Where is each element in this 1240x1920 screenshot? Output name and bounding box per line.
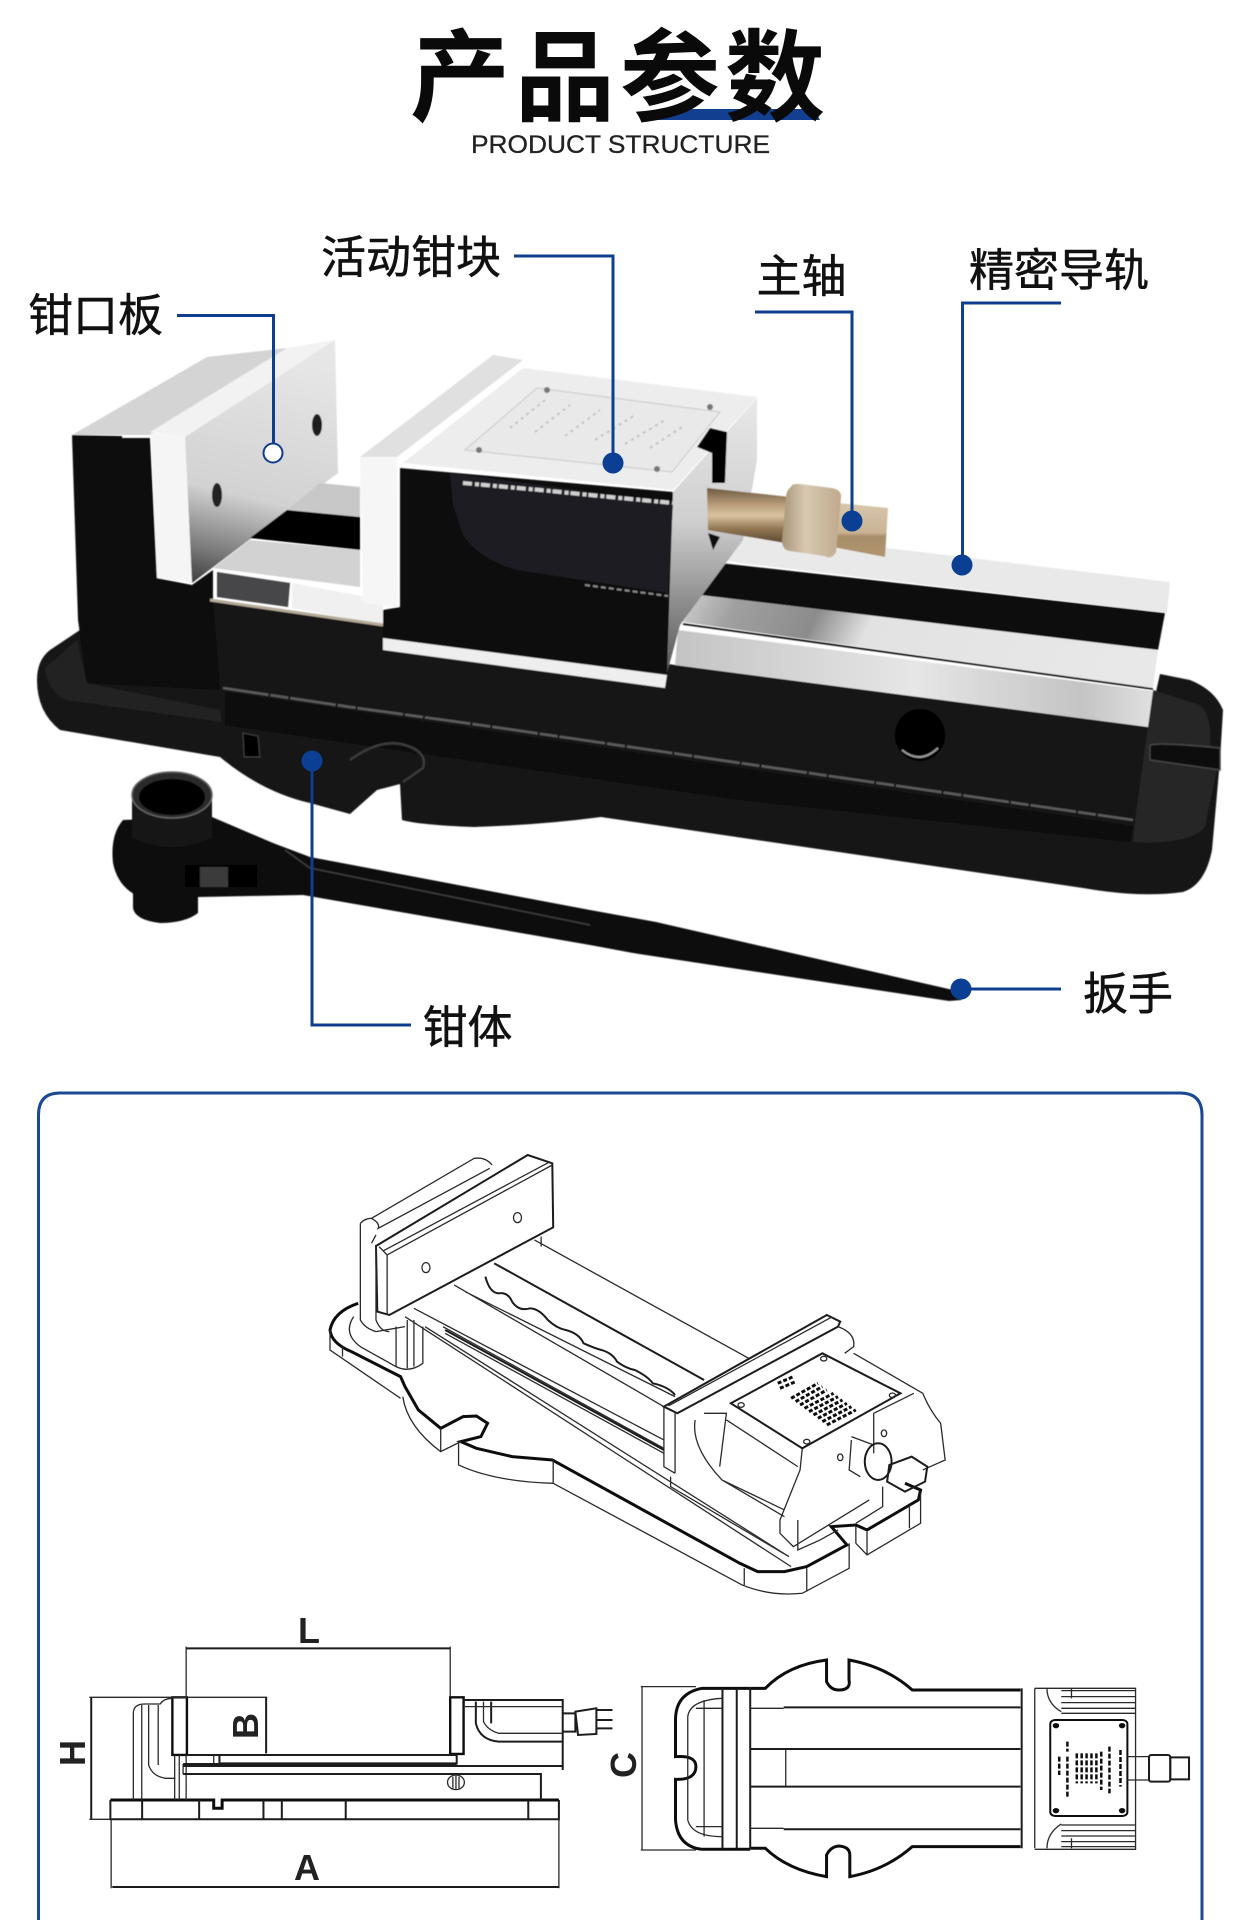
leader [962, 303, 1061, 562]
drawing: isometric vise [330, 1155, 945, 1594]
marker [952, 554, 972, 576]
moving jaw front [383, 468, 673, 673]
panel: dimension drawings [38, 1093, 1202, 1920]
dimension label: C: C [603, 1752, 644, 1778]
moving jaw recess [450, 473, 673, 593]
tray inner right [1133, 690, 1220, 842]
tray slot right [1150, 744, 1220, 770]
isometric name plate [731, 1353, 900, 1448]
tray inner left [45, 640, 222, 722]
side dimension lines [89, 1647, 559, 1888]
right black band [700, 563, 1165, 650]
wrench highlight [285, 850, 590, 925]
rear jaw plate top [150, 340, 335, 437]
top name plate [1050, 1720, 1127, 1816]
isometric rails [405, 1237, 791, 1567]
jaw slot [697, 428, 727, 483]
spindle shaft [707, 488, 790, 543]
locating lobe [350, 743, 424, 782]
label: 精密导轨 [969, 245, 1149, 296]
wrench [112, 772, 962, 1001]
top dividers and rails [688, 1688, 1035, 1848]
marker [950, 978, 972, 1000]
vise tray and body silhouette [37, 600, 1223, 894]
moving jaw base strip [383, 638, 667, 688]
wrench socket [132, 795, 212, 847]
beige strip [210, 600, 383, 625]
callout: 扳手 [950, 968, 1173, 1020]
leader [177, 316, 274, 445]
callout: 钳体 [302, 750, 513, 1053]
title text: 产品参数 [410, 23, 830, 135]
top moving jaw [1035, 1688, 1136, 1849]
jaw slot tip [708, 533, 720, 550]
label: 活动钳块 [321, 232, 501, 283]
marker [302, 750, 322, 772]
marker [602, 452, 624, 474]
callout: 钳口板 [28, 290, 282, 462]
callout: 活动钳块 [321, 232, 624, 474]
isometric rear jaw [360, 1155, 553, 1332]
black band [250, 510, 360, 550]
moving jaw plate end [360, 457, 398, 607]
dimension label: L: L [298, 1610, 320, 1651]
title accent bar [648, 109, 820, 120]
title: 产品参数 [410, 23, 830, 135]
lower casting highlight [585, 585, 668, 596]
plate holes [212, 414, 322, 507]
callout: 精密导轨 [952, 245, 1149, 576]
wrench ratchet window [185, 865, 257, 887]
dimension label: B: B [225, 1713, 266, 1739]
rear jaw plate face [185, 340, 338, 583]
wrench head and handle [112, 817, 962, 1001]
leader [755, 312, 852, 520]
isometric spindle [849, 1437, 927, 1492]
rear jaw plate end [151, 433, 192, 583]
top C dimension [641, 1687, 696, 1850]
body lower shadow [225, 692, 1133, 842]
side base [110, 1800, 559, 1819]
casting highlight [463, 483, 673, 503]
top spindle [1127, 1755, 1189, 1782]
top outline [676, 1660, 1020, 1877]
rail between jaws lower [213, 540, 360, 587]
leader [312, 762, 411, 1025]
rail between jaws upper [287, 483, 360, 517]
wrench lower socket [133, 890, 198, 923]
drawing: top view [641, 1660, 1189, 1877]
body casting ridge [223, 688, 1133, 820]
label: 钳体 [422, 1002, 513, 1053]
moving jaw side [667, 398, 757, 673]
side jaws [133, 1697, 464, 1800]
label: 扳手 [1083, 968, 1173, 1020]
marker [842, 510, 862, 532]
white block [292, 583, 383, 625]
side moving jaw and spindle [464, 1700, 612, 1770]
callout: 主轴 [755, 251, 862, 532]
subtitle: PRODUCT STRUCTURE: PRODUCT STRUCTURE [471, 131, 770, 159]
dimension label: A: A [294, 1847, 320, 1888]
spindle collar [782, 484, 841, 557]
dimension label: H: H [52, 1740, 93, 1766]
right mid rail [683, 595, 1158, 688]
leader [961, 988, 1061, 990]
rear jaw top face [72, 348, 287, 435]
side rails [183, 1755, 563, 1800]
mounting hole [895, 709, 945, 761]
spindle square end [833, 503, 888, 557]
marker [264, 444, 282, 462]
moving jaw top [403, 368, 757, 490]
label: 钳口板 [28, 290, 163, 341]
right top rail [725, 535, 1170, 613]
name plate [465, 387, 720, 472]
isometric moving jaw [664, 1315, 945, 1557]
moving jaw plate top [360, 355, 523, 457]
dark block [217, 572, 290, 607]
drawing: side elevation [89, 1647, 612, 1888]
photo: vise and wrench [37, 340, 1223, 1001]
rear jaw block [72, 435, 220, 690]
key slot [243, 733, 260, 757]
leader [514, 256, 613, 460]
rail seam [683, 624, 1153, 689]
label: 主轴 [756, 251, 847, 302]
right low rail [675, 630, 1153, 727]
isometric tray outline [330, 1303, 921, 1594]
